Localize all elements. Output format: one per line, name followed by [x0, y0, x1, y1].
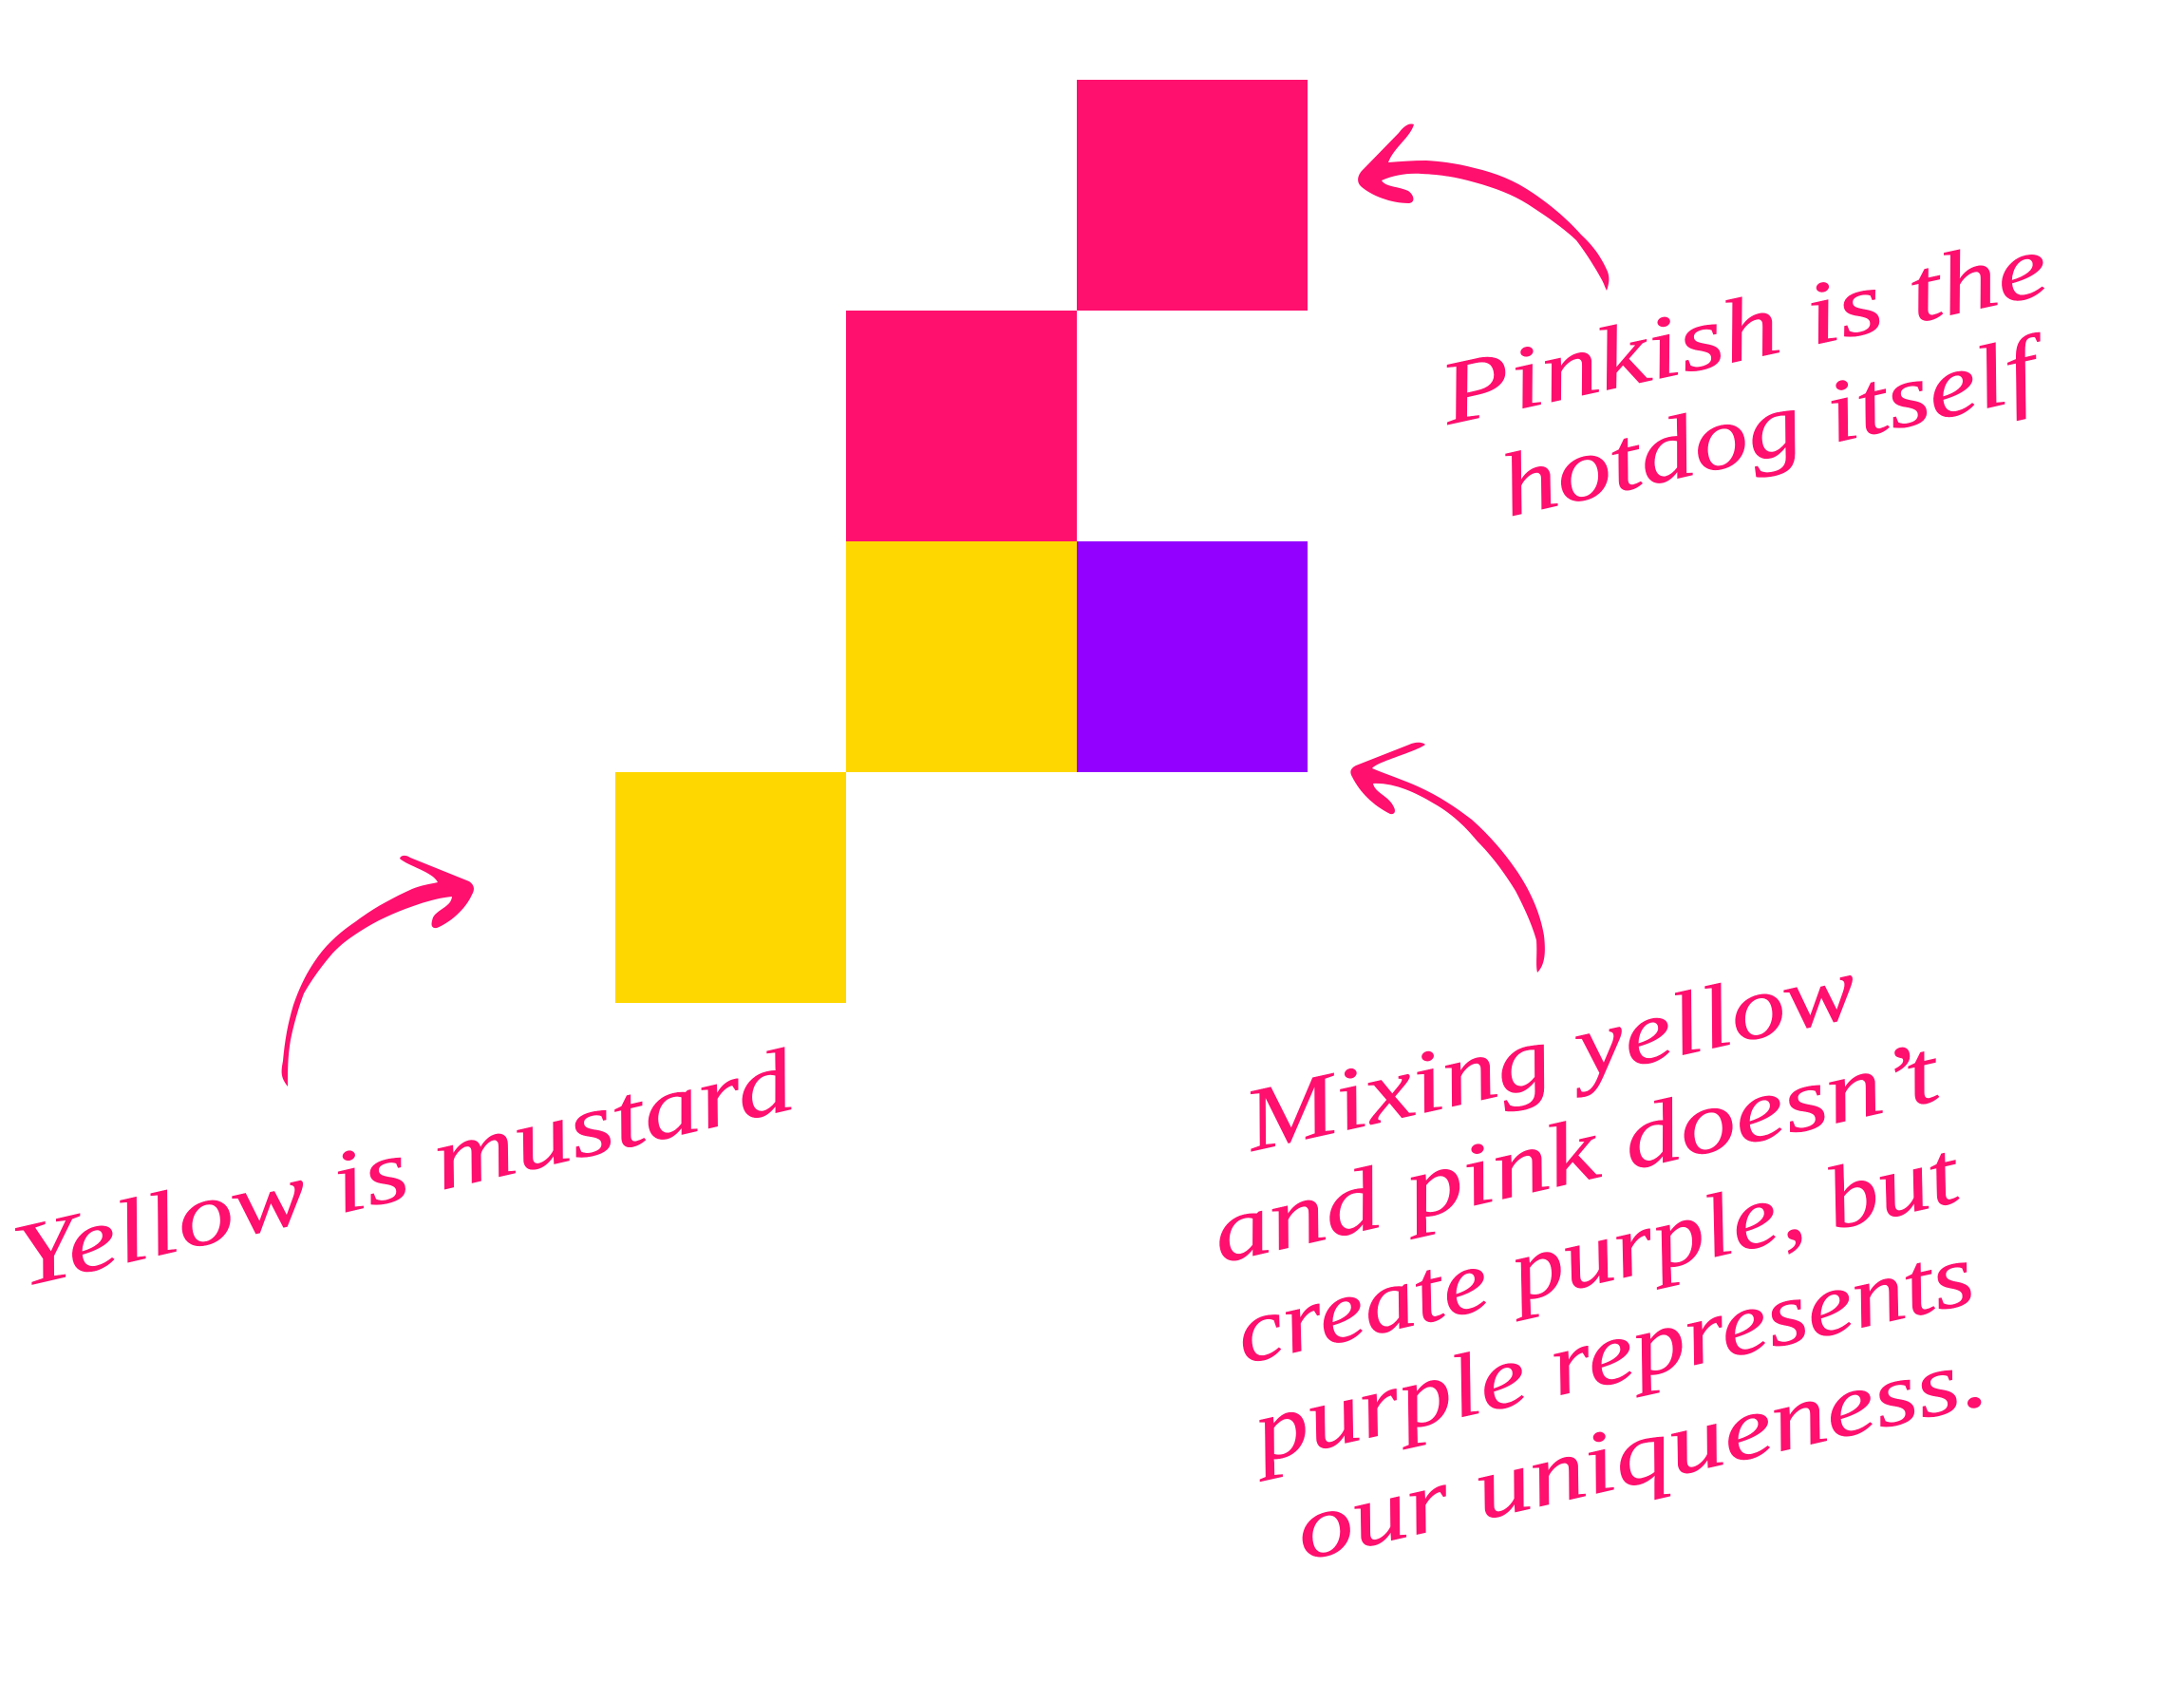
label: mixing yellow and pink: [1203, 938, 1996, 1579]
arrow: to pinkish square: [1358, 123, 1609, 291]
square: pink middle: [846, 311, 1077, 541]
arrow: to yellow square: [282, 856, 474, 1087]
line 1: Mixing yellow: [1233, 938, 1866, 1171]
arrow: to purple square: [1350, 743, 1545, 973]
square: yellow bottom left: [615, 772, 846, 1003]
line 4: purple represents: [1238, 1224, 1983, 1483]
line 2: and pink doesn’t: [1203, 1022, 1949, 1282]
pixel hotdog logo: [615, 80, 1308, 1003]
line 5: our uniqueness.: [1286, 1326, 1996, 1579]
square: purple: [1077, 541, 1308, 772]
line 3: create purple, but: [1227, 1124, 1968, 1383]
label: pinkish is the hotdog itself: [1430, 216, 2058, 536]
line 1: Pinkish is the: [1430, 216, 2057, 444]
square: pink top right: [1077, 80, 1308, 311]
square: yellow middle: [846, 541, 1077, 772]
line 2: hotdog itself: [1492, 316, 2058, 536]
label: yellow is mustard: Yellow is mustard: [4, 1030, 803, 1306]
